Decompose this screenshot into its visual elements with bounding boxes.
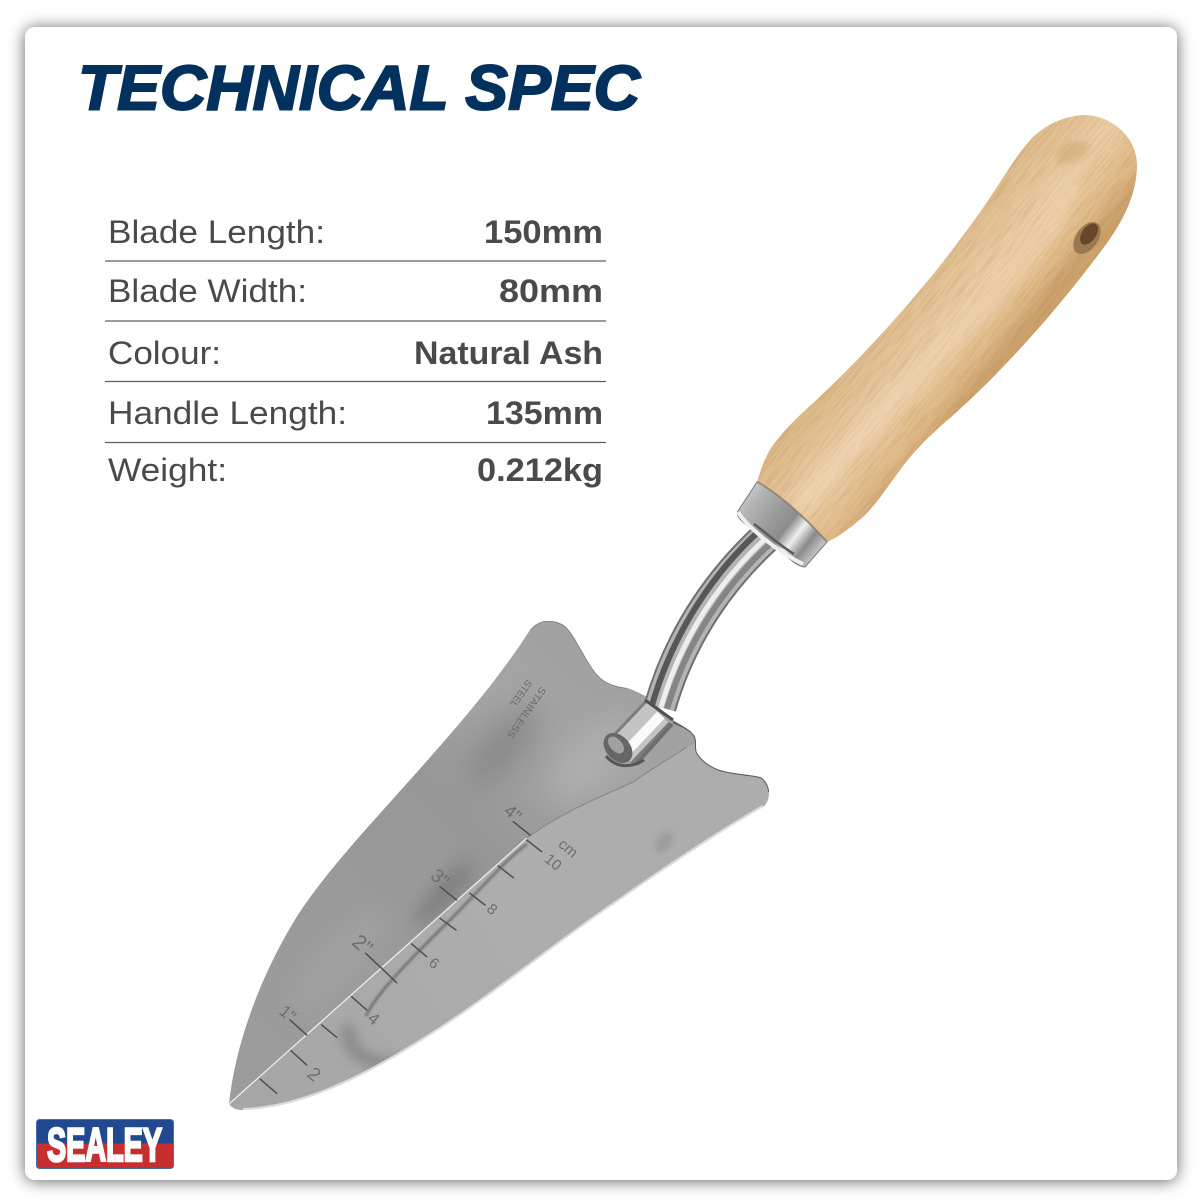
Sealey logo: SEALEY — [47, 1118, 162, 1171]
ruler numbers: 2" — [347, 930, 377, 960]
ruler numbers: 1" — [275, 1002, 300, 1026]
row: blade length: 150mm — [484, 214, 603, 250]
spec table — [105, 214, 606, 488]
ferrule on blade — [598, 700, 673, 769]
row: colour: Natural Ash — [414, 335, 603, 371]
row: handle length — [108, 395, 603, 431]
row: handle length: 135mm — [486, 395, 603, 431]
ruler numbers: 2 — [303, 1063, 324, 1086]
row: weight: 0.212kg — [477, 452, 603, 488]
title: TECHNICAL SPEC — [78, 54, 642, 124]
metal collar — [737, 482, 827, 567]
ruler numbers: cm — [555, 836, 581, 861]
ruler numbers: 3" — [426, 865, 453, 892]
row: weight: Weight: — [108, 452, 227, 488]
metal shaft — [652, 532, 771, 709]
product image: garden trowel — [229, 115, 1137, 1110]
fold line — [229, 747, 687, 1104]
wooden handle — [757, 115, 1137, 542]
row: blade length: Blade Length: — [108, 214, 325, 250]
row: colour — [108, 335, 603, 371]
row: blade length — [108, 214, 603, 250]
ruler numbers: 6 — [425, 954, 443, 973]
stamped text: stainless steel: STEEL — [507, 677, 534, 709]
ruler numbers: 4 — [364, 1008, 383, 1029]
row: weight — [108, 452, 603, 488]
row: blade width: 80mm — [499, 273, 603, 309]
trowel blade — [229, 621, 769, 1110]
lanyard hole — [1068, 217, 1106, 259]
ruler numbers: 8 — [483, 900, 501, 919]
Sealey logo — [36, 1118, 174, 1171]
row: blade width: Blade Width: — [108, 273, 307, 309]
stamped text: stainless steel: STAINLESS — [504, 684, 548, 740]
ruler ticks — [260, 822, 542, 1093]
ruler numbers: 10 — [541, 851, 565, 874]
ruler numbers: 4" — [500, 800, 526, 826]
row: handle length: Handle Length: — [108, 395, 347, 431]
ruler numbers — [275, 800, 581, 1086]
row: colour: Colour: — [108, 335, 221, 371]
row: blade width — [108, 273, 603, 309]
